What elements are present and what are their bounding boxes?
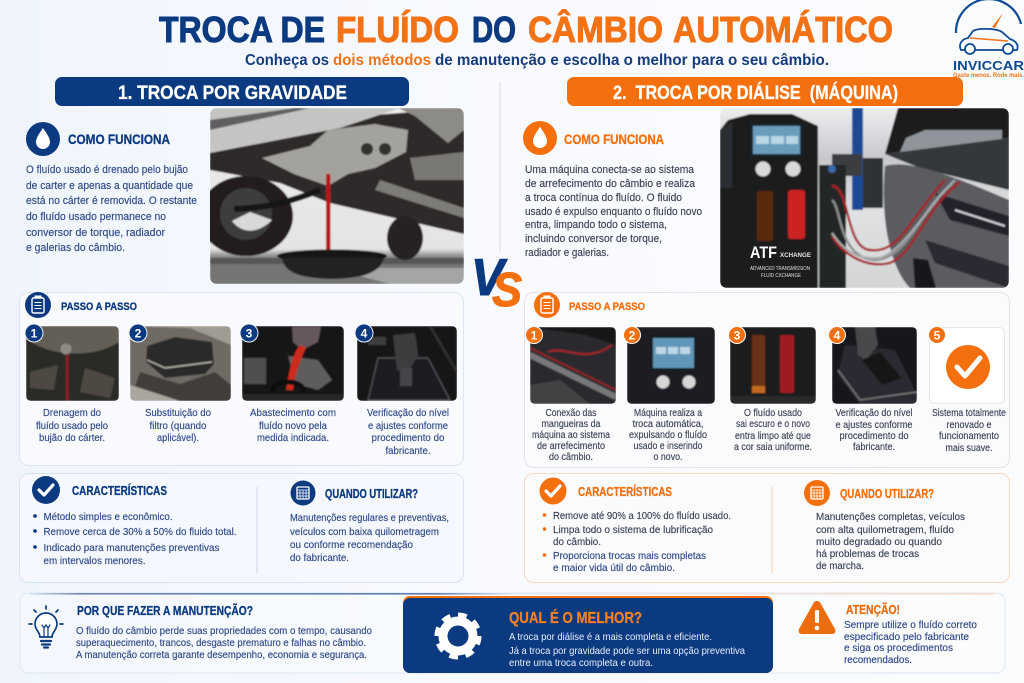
- subtitle: [245, 52, 829, 69]
- step 1: drain: [25, 324, 119, 444]
- text block: Sempre utilize o fluído correto: [844, 619, 977, 631]
- text block: recomendados.: [844, 654, 912, 666]
- badge 2: 2: [629, 328, 636, 342]
- photo: fluid exchange machine connected to car: FLUID CXCHANGE: [761, 273, 801, 279]
- text block: veículos com baixa quilometragem: [290, 526, 439, 538]
- logo: Inviccar: [953, 0, 1024, 79]
- text block: [26, 164, 197, 254]
- caption 3: fluído novo pela: [259, 420, 327, 432]
- photo: fluid exchange machine connected to car: XCHANGE: [780, 252, 812, 259]
- text block: conversor de torque, radiador: [26, 227, 165, 239]
- text block: e galerias do câmbio.: [26, 242, 125, 254]
- icon: light bulb: [29, 606, 63, 648]
- banner: method 2: [567, 77, 963, 106]
- caption 3: Abastecimento com: [250, 407, 336, 419]
- banner: method 1: [55, 77, 409, 106]
- banner: method 2: 2. TROCA POR DIÁLISE (MÁQUINA): [613, 82, 898, 104]
- bullet list: [33, 511, 237, 567]
- heading: CARACTERÍSTICAS: [72, 483, 167, 498]
- heading: QUANDO UTILIZAR?: [840, 487, 934, 501]
- badge 3: 3: [246, 326, 253, 340]
- section: como funciona diálise: [523, 121, 702, 259]
- panel: passo a passo gravidade: [20, 292, 464, 466]
- caption 5: [932, 407, 1006, 454]
- text block: A troca por diálise é a mais completa e eficiente.: [509, 631, 712, 643]
- bullet list: Método simples e econômico.: [44, 511, 172, 523]
- text block: A manutenção correta garante desempenho, economia e segurança.: [76, 649, 367, 661]
- text block: [76, 625, 372, 661]
- bullet list: em intervalos menores.: [44, 555, 146, 567]
- heading: COMO FUNCIONA: [564, 131, 664, 147]
- icon: drop blue: [26, 122, 60, 156]
- section: atenção: [799, 601, 977, 666]
- caption 4: [836, 407, 913, 453]
- step 4: check: [355, 324, 457, 457]
- icon: orange check: [946, 345, 990, 389]
- VS badge: [471, 249, 522, 317]
- badge 2: 2: [135, 326, 142, 340]
- caption 2: usado e inserindo: [634, 440, 703, 452]
- caption 5: mais suave.: [946, 442, 992, 454]
- caption 2: [145, 407, 211, 444]
- heading: PASSO A PASSO: [61, 301, 137, 313]
- panel: passo a passo diálise: [524, 292, 1010, 468]
- photo: fluid exchange machine connected to car: [720, 108, 1009, 288]
- caption 1: fluído usado pelo: [36, 420, 108, 432]
- photo: fluid draining under car: [199, 108, 464, 284]
- text block: [290, 512, 449, 564]
- text block: usado é expulso enquanto o fluído novo: [525, 206, 702, 218]
- icon: warning triangle: [799, 601, 835, 634]
- bullet list: do câmbio.: [553, 536, 601, 548]
- caption 2: [629, 407, 707, 463]
- text block: do fluído usado permanece no: [26, 211, 166, 223]
- badge 1: 1: [31, 326, 38, 340]
- caption 3: sai escuro e o novo: [736, 418, 810, 430]
- caption 2: Máquina realiza a: [634, 407, 702, 419]
- step 2: machine screen: [624, 326, 715, 463]
- text block: com alta quilometragem, fluído: [816, 524, 954, 536]
- caption 2: filtro (quando: [150, 420, 207, 432]
- text block: especificado pelo fabricante: [844, 631, 969, 643]
- text block: O fluído usado é drenado pelo bujão: [26, 164, 188, 176]
- text block: Manutenções completas, veículos: [816, 511, 965, 523]
- subtitle: dois métodos: [333, 52, 431, 69]
- bullet list: [543, 510, 731, 574]
- text block: entra, limpando todo o sistema,: [525, 219, 667, 231]
- title: DO: [472, 9, 516, 50]
- text block: de arrefecimento do câmbio e realiza: [525, 178, 696, 190]
- caption 1: mangueiras da: [542, 418, 601, 430]
- text block: está no cárter é removida. O restante: [26, 195, 197, 207]
- caption 3: medida indicada.: [257, 432, 329, 444]
- banner: method 1: 1. TROCA POR GRAVIDADE: [118, 83, 347, 104]
- heading: CARACTERÍSTICAS: [578, 484, 672, 499]
- caption 4: Verificação do nível: [836, 407, 912, 419]
- section: por que fazer a manutenção: [29, 603, 372, 661]
- bullet list: e maior vida útil do câmbio.: [553, 562, 675, 574]
- title: AUTOMÁTICO: [673, 9, 893, 50]
- text block: Manutenções regulares e preventivas,: [290, 512, 449, 524]
- caption 1: bujão do cárter.: [39, 432, 105, 444]
- badge 4: 4: [361, 326, 368, 340]
- icon: drop orange: [523, 121, 557, 155]
- icon: calendar blue: [290, 480, 316, 506]
- title: [159, 8, 893, 50]
- caption 4: procedimento do: [840, 430, 909, 442]
- title: CÂMBIO: [528, 8, 663, 50]
- bullet list: Remove até 90% a 100% do fluído usado.: [553, 510, 731, 522]
- text block: do fabricante.: [290, 552, 349, 564]
- text block: radiador e galerias.: [525, 247, 609, 259]
- title: TROCA DE: [159, 9, 325, 50]
- caption 1: Drenagem do: [43, 407, 101, 419]
- section: como funciona gravidade: [26, 122, 197, 254]
- panel: bottom strip: [20, 593, 1005, 673]
- caption 3: [250, 407, 336, 444]
- subtitle: de manutenção e escolha o melhor para o seu câmbio.: [435, 52, 829, 69]
- badge 1: 1: [531, 328, 538, 342]
- step 1: hoses: [526, 326, 616, 463]
- caption 5: Sistema totalmente: [932, 407, 1006, 419]
- text block: Uma máquina conecta-se ao sistema: [525, 164, 695, 176]
- caption 4: Verificação do nível: [367, 407, 449, 419]
- text block: entre uma troca completa e outra.: [509, 657, 653, 669]
- caption 3: O fluído usado: [744, 407, 802, 419]
- badge 3: 3: [734, 328, 741, 342]
- caption 5: funcionamento: [939, 430, 999, 442]
- caption 3: a cor saia uniforme.: [734, 441, 812, 453]
- heading: COMO FUNCIONA: [68, 131, 170, 147]
- VS badge: S: [492, 264, 522, 317]
- logo: Inviccar: Gaste menos. Rode mais.: [953, 73, 1024, 79]
- caption 3: entra limpo até que: [735, 430, 811, 442]
- caption 3: [734, 407, 812, 453]
- text block: e siga os procedimentos: [844, 642, 953, 654]
- caption 5: renovado e: [946, 419, 992, 431]
- heading: QUANDO UTILIZAR?: [325, 487, 418, 501]
- step 2: filter: [129, 324, 231, 444]
- caption 1: Conexão das: [546, 407, 596, 419]
- bullet list: Indicado para manutenções preventivas: [44, 542, 220, 554]
- heading: ATENÇÃO!: [846, 602, 900, 617]
- text block: Já a troca por gravidade pode ser uma opção preventiva: [509, 645, 745, 657]
- panel: características e uso diálise: [524, 474, 1010, 582]
- caption 4: [367, 407, 449, 457]
- caption 2: expulsando o fluído: [629, 429, 707, 441]
- caption 2: troca automática,: [632, 418, 704, 430]
- text block: [844, 619, 977, 666]
- caption 1: máquina ao sistema: [532, 429, 610, 441]
- icon: gear: [439, 617, 477, 655]
- caption 2: o novo.: [654, 451, 682, 463]
- subtitle: Conheça os: [245, 52, 329, 69]
- text block: O fluído do câmbio perde suas propriedades com o tempo, causando: [76, 625, 372, 637]
- caption 1: [532, 407, 610, 463]
- caption 4: e ajustes conforme: [836, 419, 913, 431]
- caption 1: de arrefecimento: [537, 440, 605, 452]
- section: qual é o melhor: [403, 596, 773, 673]
- bullet list: Limpa todo o sistema de lubrificação: [553, 524, 713, 536]
- caption 1: do câmbio.: [549, 451, 593, 463]
- caption 4: e ajustes conforme: [368, 420, 448, 432]
- text block: há problemas de trocas: [816, 548, 919, 560]
- logo: Inviccar: INVICCAR: [953, 59, 1024, 73]
- text block: muito degradado ou quando: [816, 536, 942, 548]
- step 3: refill: [240, 324, 344, 444]
- icon: clipboard orange: [534, 292, 560, 318]
- caption 4: procedimento do: [372, 432, 445, 444]
- text block: a troca contínua do fluído. O fluido: [525, 192, 682, 204]
- icon: calendar orange: [804, 480, 830, 506]
- icon: clipboard blue: [25, 292, 51, 318]
- photo: fluid exchange machine connected to car: ATF: [750, 243, 777, 262]
- panel: características e uso gravidade: [20, 474, 464, 582]
- bullet list: Proporciona trocas mais completas: [553, 550, 706, 562]
- icon: check orange: [540, 478, 566, 504]
- VS badge: V: [471, 249, 508, 307]
- text block: [816, 511, 965, 572]
- badge 5: 5: [934, 328, 941, 342]
- text block: de carter e apenas a quantidade que: [26, 180, 193, 192]
- bullet list: Remove cerca de 30% a 50% do fluido total.: [44, 526, 236, 538]
- step 4: level check: [828, 326, 917, 453]
- caption 4: fabricante.: [386, 445, 430, 457]
- text block: superaquecimento, trancos, desgaste prematuro e falhas no câmbio.: [76, 637, 366, 649]
- photo: fluid exchange machine connected to car: ADVANCED TRANSMISSION: [750, 266, 810, 272]
- heading: PASSO A PASSO: [569, 301, 645, 313]
- text block: de marcha.: [816, 560, 864, 572]
- text block: [525, 164, 702, 259]
- caption 1: [36, 407, 108, 444]
- text block: ou conforme recomendação: [290, 539, 413, 551]
- step 3: tubes: [728, 326, 816, 453]
- caption 4: fabricante.: [853, 441, 895, 453]
- badge 4: 4: [834, 328, 841, 342]
- text block: [509, 631, 745, 669]
- title: FLUÍDO: [336, 9, 459, 50]
- text block: incluindo conversor de torque,: [525, 233, 662, 245]
- step 5: done: [928, 326, 1006, 454]
- heading: QUAL É O MELHOR?: [509, 608, 642, 627]
- caption 2: aplicável).: [157, 432, 199, 444]
- heading: POR QUE FAZER A MANUTENÇÃO?: [77, 603, 253, 618]
- caption 2: Substituição do: [145, 407, 211, 419]
- icon: check blue: [32, 476, 60, 504]
